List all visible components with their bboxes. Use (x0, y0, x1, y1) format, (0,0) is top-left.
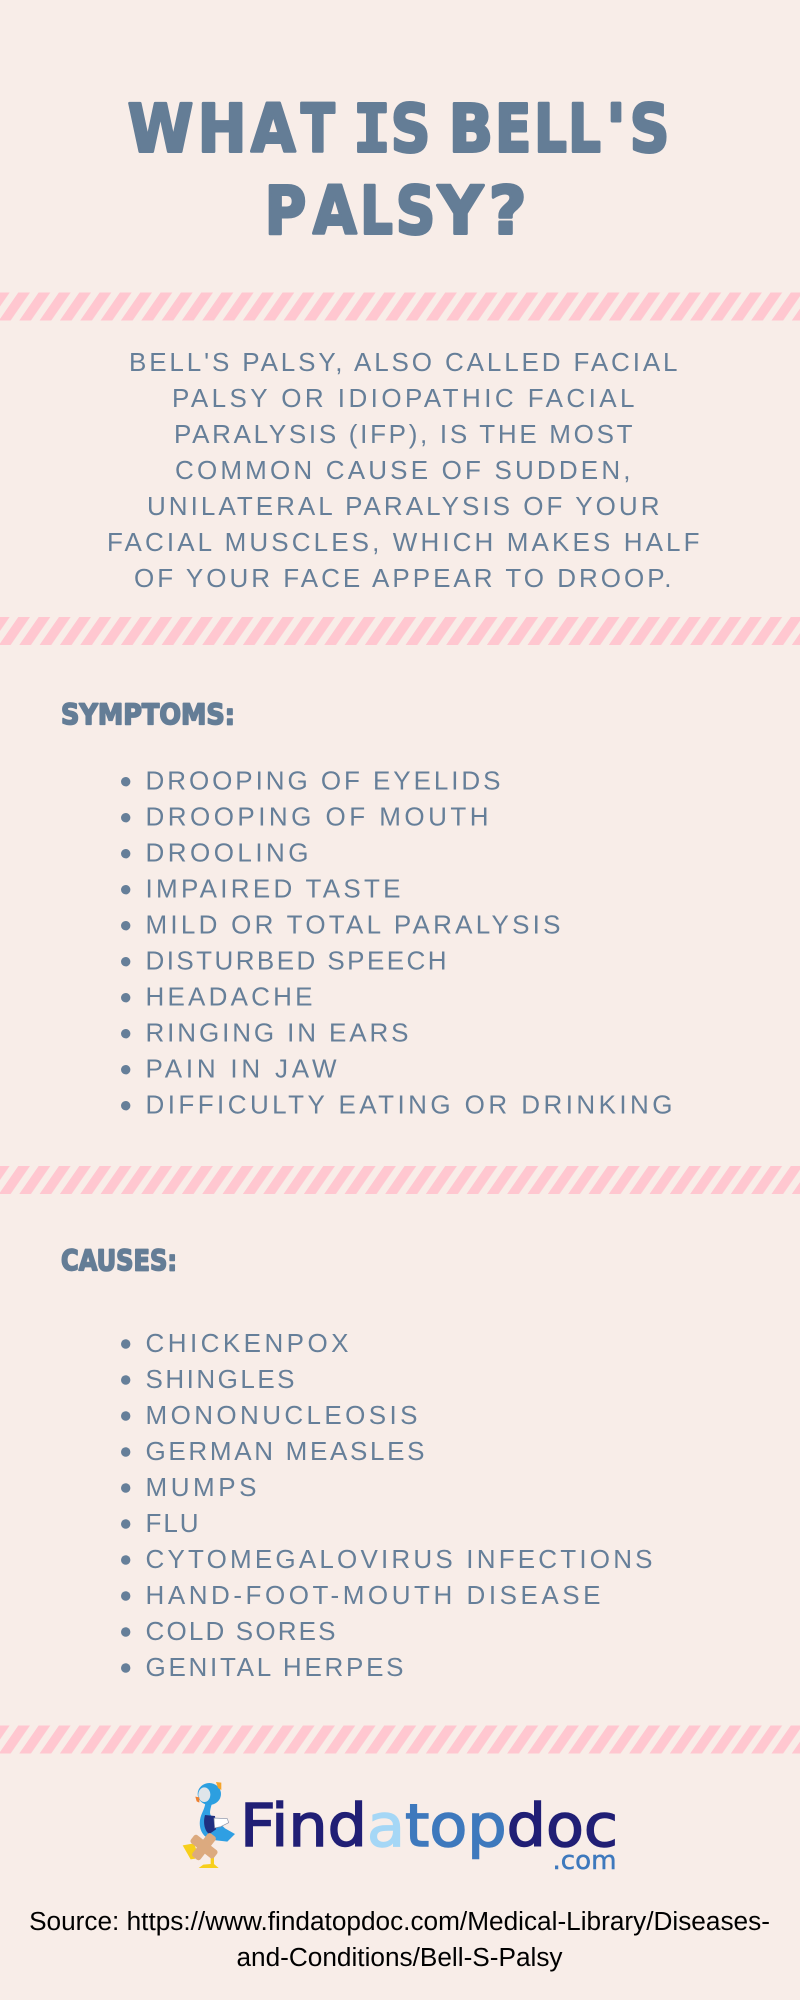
causes list: SHINGLES (146, 1364, 294, 1394)
causes list: GENITAL HERPES (146, 1652, 404, 1682)
panel: causes (61, 1244, 652, 1682)
title: ' (606, 90, 626, 168)
causes list (121, 1328, 652, 1682)
causes list: MUMPS (146, 1472, 256, 1502)
title: S (391, 90, 430, 168)
wordmark: Findatopdoc (240, 1791, 618, 1860)
title: A (313, 172, 357, 250)
wordmark suffix: .com (552, 1846, 616, 1876)
symptoms list: DROOPING OF MOUTH (146, 802, 488, 832)
symptoms list: HEADACHE (146, 982, 312, 1012)
causes list: FLU (146, 1508, 198, 1538)
source citation: Source: https://www.findatopdoc.com/Medical-Library/Diseases- (29, 1906, 770, 1936)
title: L (568, 90, 601, 168)
intro paragraph: PARALYSIS (IFP), IS THE MOST (174, 419, 633, 449)
title: S (396, 172, 435, 250)
symptoms list: IMPAIRED TASTE (146, 874, 400, 904)
intro paragraph (107, 347, 700, 593)
causes list: CHICKENPOX (146, 1328, 348, 1358)
intro paragraph: FACIAL MUSCLES, WHICH MAKES HALF (107, 527, 700, 557)
title: Y (437, 172, 484, 250)
title: E (495, 90, 531, 168)
striped divider 3 (0, 1166, 800, 1194)
title: H (198, 90, 246, 168)
symptoms list: DISTURBED SPEECH (146, 946, 446, 976)
causes list: MONONUCLEOSIS (146, 1400, 418, 1430)
source citation (29, 1906, 770, 1972)
title: I (353, 90, 391, 168)
title: S (630, 90, 669, 168)
icon: bird mascot with bandage (183, 1782, 235, 1868)
intro paragraph: UNILATERAL PARALYSIS OF YOUR (147, 491, 660, 521)
source citation: and-Conditions/Bell-S-Palsy (236, 1942, 563, 1972)
striped divider 2 (0, 617, 800, 645)
logo: Findatopdoc (183, 1782, 618, 1876)
striped divider 1 (0, 292, 800, 320)
causes list: HAND-FOOT-MOUTH DISEASE (146, 1580, 600, 1610)
intro paragraph: BELL'S PALSY, ALSO CALLED FACIAL (129, 347, 678, 377)
causes list: CYTOMEGALOVIRUS INFECTIONS (146, 1544, 652, 1574)
intro paragraph: OF YOUR FACE APPEAR TO DROOP. (134, 563, 672, 593)
symptoms list: DROOLING (146, 838, 308, 868)
symptoms list: DROOPING OF EYELIDS (146, 766, 500, 796)
causes list: GERMAN MEASLES (146, 1436, 424, 1466)
title: B (449, 90, 493, 168)
heading: symptoms: SYMPTOMS: (61, 698, 235, 732)
title: P (265, 172, 306, 250)
panel: symptoms (61, 698, 672, 1120)
causes list: COLD SORES (146, 1616, 336, 1646)
symptoms list (121, 766, 672, 1120)
striped divider 4 (0, 1726, 800, 1754)
intro paragraph: COMMON CAUSE OF SUDDEN, (175, 455, 630, 485)
symptoms list: RINGING IN EARS (146, 1018, 408, 1048)
title: L (360, 172, 393, 250)
symptoms list: PAIN IN JAW (146, 1054, 337, 1084)
title: A (251, 90, 296, 168)
symptoms list: DIFFICULTY EATING OR DRINKING (146, 1090, 672, 1120)
symptoms list: MILD OR TOTAL PARALYSIS (146, 910, 560, 940)
title: T (301, 90, 335, 168)
title: L (534, 90, 567, 168)
title: W (128, 90, 193, 168)
title (128, 90, 669, 250)
title: ? (489, 172, 527, 250)
intro paragraph: PALSY OR IDIOPATHIC FACIAL (172, 383, 634, 413)
heading: causes: CAUSES: (61, 1244, 177, 1278)
